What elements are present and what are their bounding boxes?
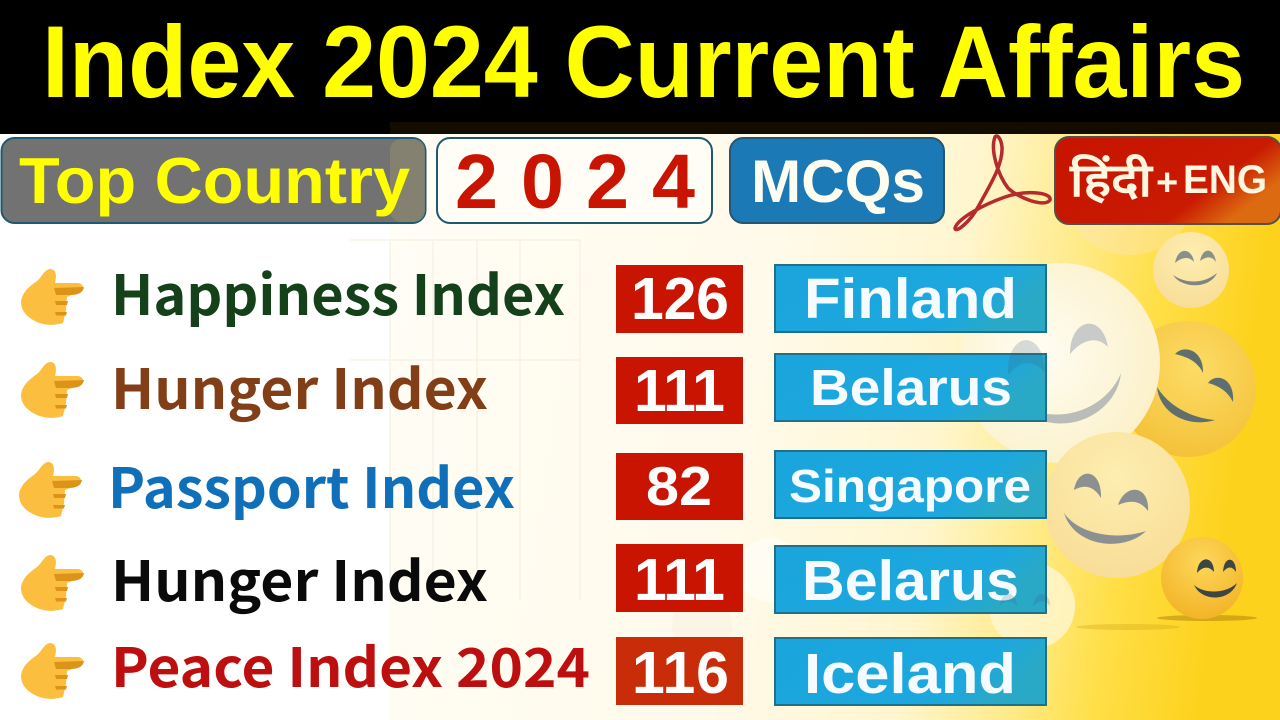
badge: Hindi + ENG: + (1156, 162, 1178, 204)
title band (0, 0, 1280, 134)
smiley: large pale top (960, 263, 1160, 463)
icon: PDF logo (955, 136, 1050, 230)
badge: year 2024: 2 (586, 139, 629, 225)
smiley: bottom (1076, 537, 1257, 630)
badge: MCQs (730, 138, 944, 223)
row: Happiness Index (21, 251, 1046, 333)
badge: Hindi + ENG (1055, 137, 1280, 224)
country (775, 451, 1046, 518)
country: Iceland (804, 642, 1016, 706)
badge: Top Country: Top Country (19, 144, 410, 217)
label: Happiness Index (111, 251, 565, 331)
smiley: middle (1044, 432, 1190, 578)
country: Belarus (802, 549, 1019, 613)
label: Peace Index 2024 (111, 624, 590, 703)
country (775, 638, 1046, 706)
badge: Hindi + ENG: ENG (1183, 158, 1267, 202)
icon: pointing hand (19, 462, 82, 518)
smiley: tilted right (1120, 321, 1256, 457)
rank: 111 (634, 358, 725, 424)
ghost smiley overlays (1000, 340, 1050, 606)
row: Peace Index 2024 (21, 624, 1046, 706)
label: Hunger Index (111, 345, 488, 425)
label: Passport Index (108, 444, 515, 524)
icon: pointing hand (21, 643, 84, 699)
smiley decorations (960, 232, 1257, 649)
icon: pointing hand (21, 269, 84, 325)
country (775, 354, 1046, 421)
rank (616, 544, 743, 613)
badge: year 2024 (437, 138, 712, 225)
rank: 126 (631, 266, 729, 332)
country: Belarus (810, 359, 1012, 416)
country: Singapore (789, 460, 1031, 512)
badge: Hindi + ENG: हिंदी (1069, 154, 1154, 206)
rank: 116 (632, 640, 729, 706)
row: Passport Index (19, 444, 1046, 524)
badge: year 2024: 2 (455, 139, 498, 225)
smiley: faint low (989, 563, 1075, 649)
badge: year 2024: 4 (652, 139, 695, 225)
row: Hunger Index black (21, 537, 1046, 617)
icon: pointing hand (21, 555, 84, 611)
label: Hunger Index (111, 537, 488, 617)
row: Hunger Index brown (21, 345, 1046, 425)
rank: 111 (634, 547, 725, 613)
smiley: small top (1153, 232, 1229, 308)
title: Index 2024 Current Affairs (42, 5, 1245, 119)
country: Finland (804, 267, 1017, 331)
badge: year 2024: 0 (521, 139, 564, 225)
badge: MCQs: MCQs (751, 148, 925, 215)
icon: pointing hand (21, 362, 84, 418)
rank (616, 453, 743, 520)
rank: 82 (646, 455, 712, 517)
